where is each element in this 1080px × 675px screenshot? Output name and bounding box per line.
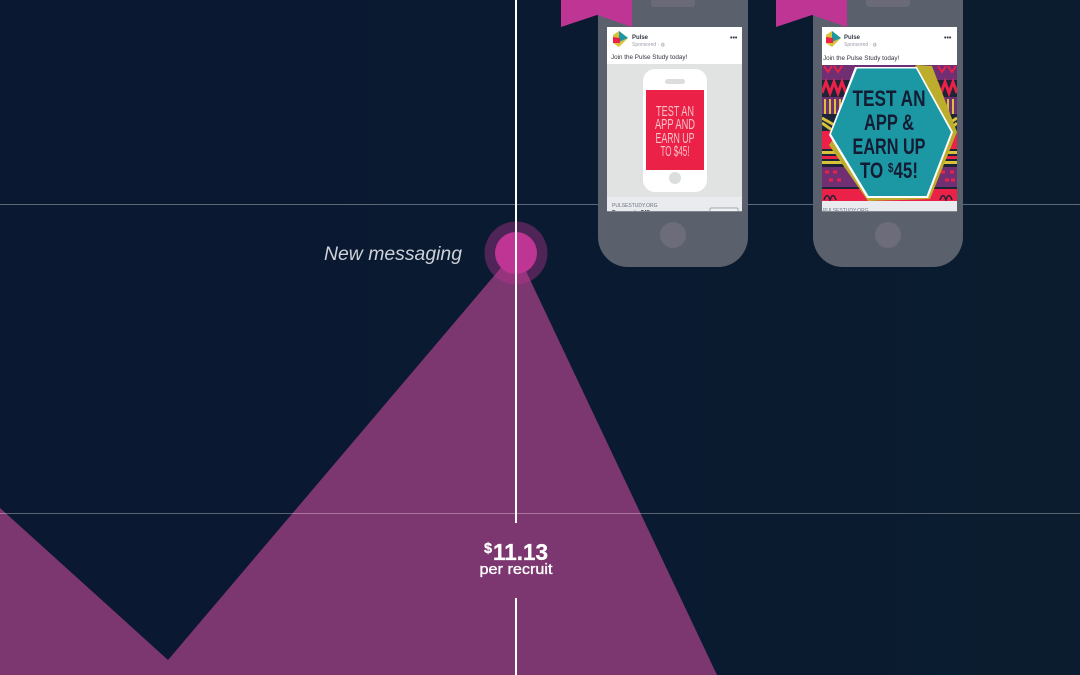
ad screen: patterned hexagon creative: EARN UP [852, 134, 926, 159]
ad screen: illustrated phone creative: TEST AN [656, 103, 694, 120]
ad screen: illustrated phone creative: EARN UP [656, 130, 694, 147]
label: New messaging: New messaging [324, 243, 462, 265]
ad screen: illustrated phone creative: Join the Pulse Study today! [611, 54, 688, 61]
phone mockup: ad variant 1 [598, 0, 748, 267]
decorative pattern bands [822, 65, 957, 80]
ad screen: patterned hexagon creative: ••• [944, 35, 952, 42]
ad screen: patterned hexagon creative: PULSESTUDY.ORG [823, 208, 869, 214]
area chart: purple cost peak [0, 250, 717, 675]
ad screen: illustrated phone creative: Sponsored · ◍ [632, 42, 666, 48]
value: cost per recruit: 11.13 [493, 539, 548, 565]
ad screen: patterned hexagon creative: TEST AN [852, 86, 926, 111]
ad screen: patterned hexagon creative: $ [888, 160, 894, 175]
value: cost per recruit [480, 539, 552, 578]
ad screen: illustrated phone creative: SIGN UP [715, 210, 733, 215]
vertical timeline line [515, 0, 517, 675]
ad screen: patterned hexagon creative: Pulse [844, 35, 861, 41]
data point marker: new messaging [484, 222, 548, 284]
ribbon: ad variant 1 [561, 0, 632, 27]
phone mockup: ad variant 2 [813, 0, 963, 267]
ad screen: patterned hexagon creative: Sponsored · ◍ [844, 42, 878, 48]
ribbon: ad variant 2 [776, 0, 847, 27]
ad screen: illustrated phone creative: TO $45! [660, 143, 690, 160]
ad screen: illustrated phone creative: Earn up to $45 [612, 210, 650, 216]
ad screen: patterned hexagon creative: 45! [894, 158, 918, 183]
value: cost per recruit: $ [484, 541, 492, 557]
ad screen: illustrated phone creative: APP AND [655, 116, 695, 133]
ad screen: illustrated phone creative: PULSESTUDY.ORG [612, 203, 658, 209]
ad screen: patterned hexagon creative: APP & [864, 110, 914, 135]
ad screen: patterned hexagon creative: TO [860, 158, 890, 183]
ad screen: patterned hexagon creative [822, 27, 957, 214]
ad screen: illustrated phone creative: ••• [730, 35, 738, 42]
ad screen: illustrated phone creative: Pulse [632, 35, 649, 41]
ad screen: patterned hexagon creative: Join the Pulse Study today! [823, 55, 900, 62]
value: cost per recruit: per recruit [480, 562, 552, 578]
ad screen: illustrated phone creative [607, 27, 742, 218]
